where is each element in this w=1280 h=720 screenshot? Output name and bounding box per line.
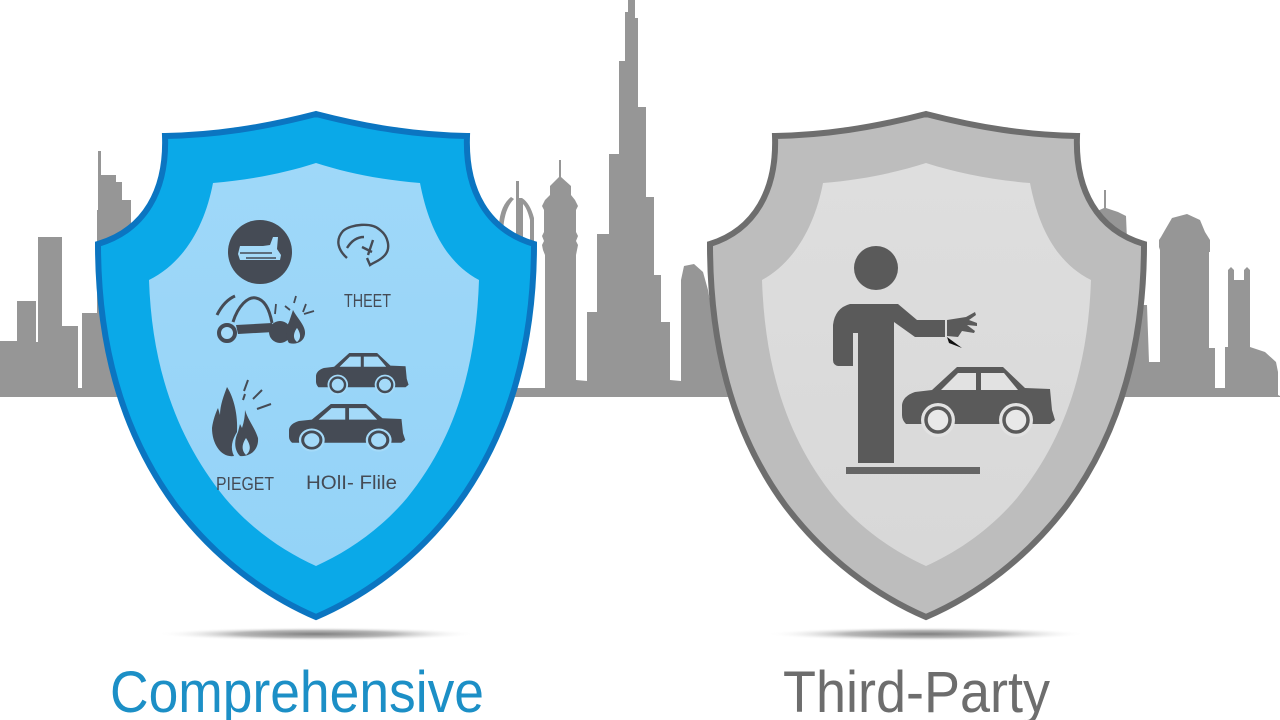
skyline: minaret tower [500,0,740,397]
text: hole label: HOlI- Flile [306,473,397,494]
icon: small car with fire [217,296,314,344]
icon: flame [212,380,271,456]
ground shadow: comprehensive [156,627,476,641]
skyline: dome behind blue shield [499,181,534,242]
skyline: right towers [1100,214,1280,397]
icon: car top right [316,353,409,395]
icon: car [902,367,1055,437]
shield: third-party [710,114,1144,617]
icon: theft [338,225,388,265]
shield outer [98,114,534,617]
icon: car bottom [289,404,405,452]
icon: floor line [846,467,980,474]
city skyline [0,0,1280,397]
shield inner [149,163,479,566]
shield inner [762,163,1091,566]
icon: accident circle [228,220,292,284]
text: fire label: PIEGET [216,474,274,494]
skyline: dome behind grey shield [1095,190,1127,240]
icon: person [833,246,977,463]
ground shadow: third-party [766,627,1086,641]
text: theft label: THEET [344,291,391,311]
shield: comprehensive [98,114,534,617]
skyline: left towers [0,151,200,397]
shield outer [710,114,1144,617]
